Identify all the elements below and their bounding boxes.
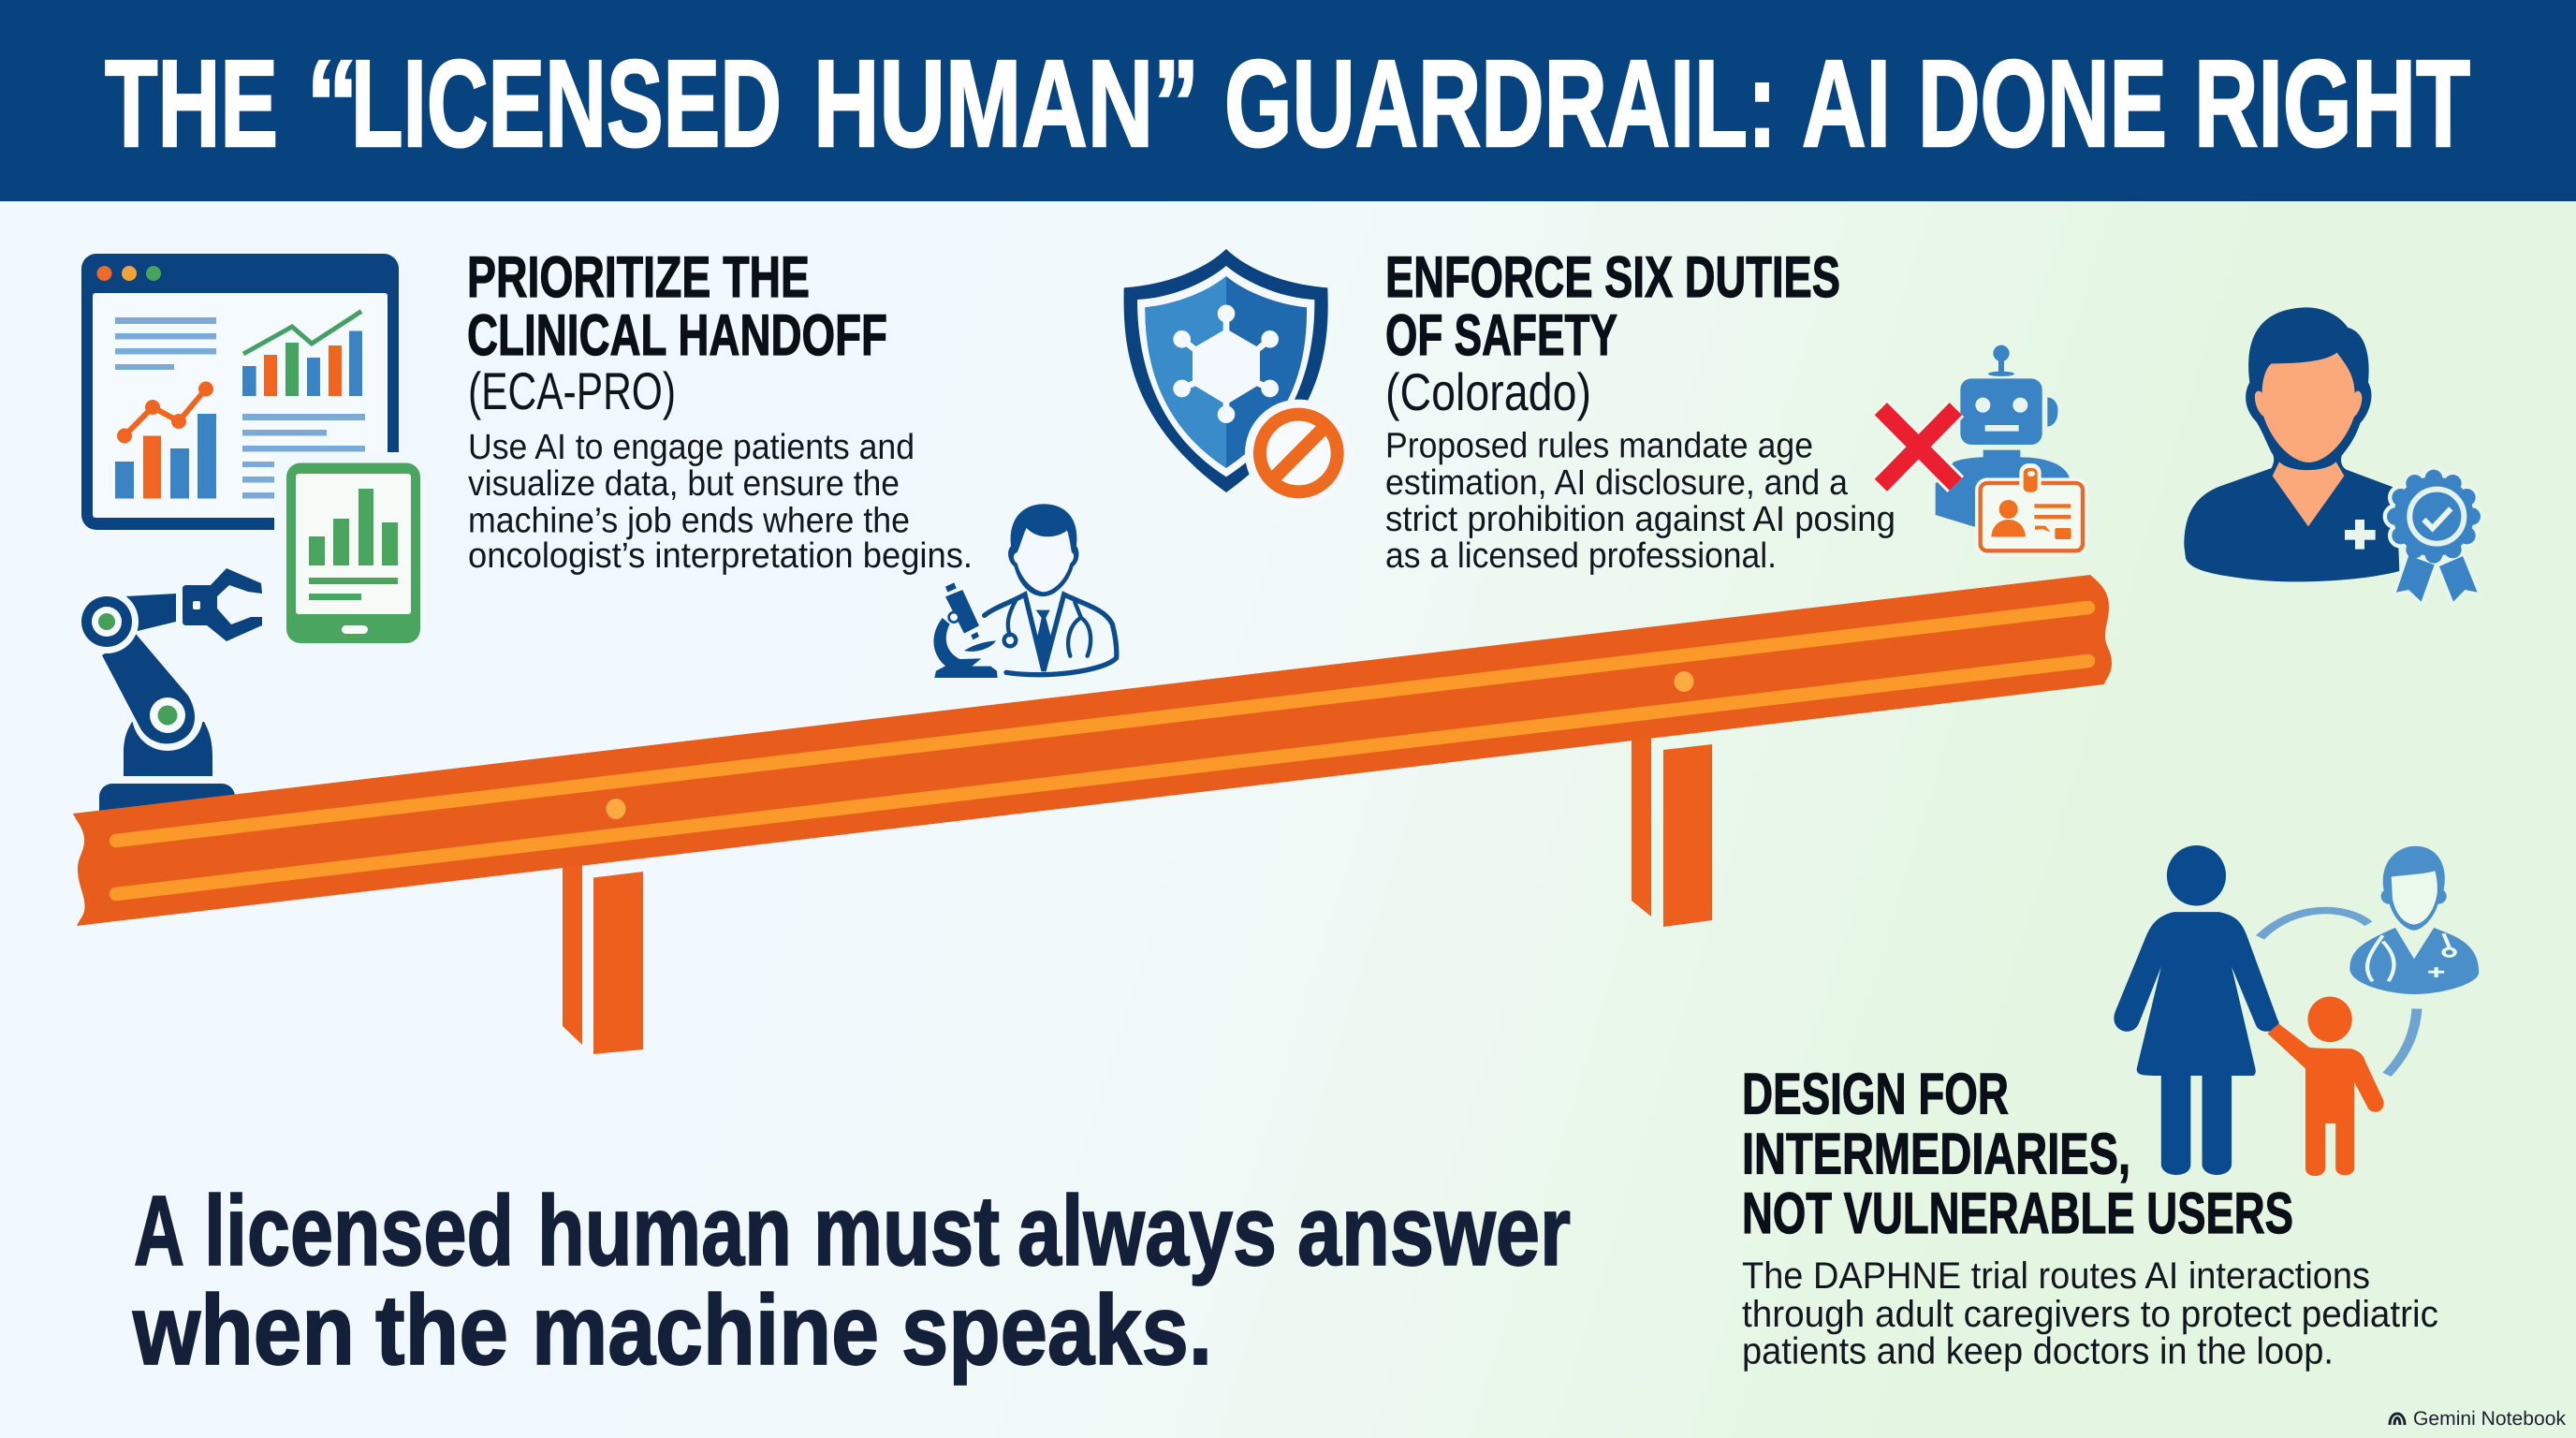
tagline: A [134,1176,184,1286]
rail highlights [116,608,2088,894]
body text: estimation, AI disclosure, and a [1385,463,1849,503]
icon: shield with prohibition sign [1124,249,1353,506]
panel: prioritize the clinical handoff [467,245,973,576]
tagline: when [132,1275,355,1386]
heading [1742,1062,2293,1246]
icon: caregiver, child and doctor [2114,845,2479,1176]
watermark: Gemini Notebook: Gemini Notebook [2413,1408,2566,1430]
body text: oncologist’s interpretation begins. [468,536,973,576]
tagline: must [813,1176,1000,1286]
ID badge [1981,463,2083,550]
heading: PRIORITIZE THE [467,245,810,310]
tagline: human [537,1176,792,1286]
icon: licensed professional with ribbon [2184,307,2481,602]
body text: as a licensed professional. [1385,536,1777,576]
title: GUARDRAIL: [1224,35,1777,172]
body text: Use AI to engage patients and [468,428,915,467]
red X [1881,409,1955,485]
title [105,35,2470,172]
caregiver [2114,845,2279,1175]
body text [1385,427,1895,576]
title: HUMAN” [813,35,1199,172]
icon: dashboard monitor with phone [81,254,433,658]
doctor [2349,846,2479,994]
body text: strict prohibition against AI posing [1385,500,1895,539]
panel: enforce six duties of safety [1385,245,1895,576]
rail beam [73,575,2112,926]
heading: NOT VULNERABLE USERS [1742,1181,2293,1246]
title: LICENSED [351,35,782,172]
tagline: speaks. [901,1275,1212,1386]
icon: robot arm [75,568,262,840]
guardrail [73,575,2112,1054]
title: RIGHT [2194,35,2470,172]
heading: CLINICAL HANDOFF [467,303,887,368]
tagline: answer [1297,1176,1571,1286]
heading [467,245,887,368]
body text: patients and keep doctors in the loop. [1742,1331,2334,1372]
body text: machine’s job ends where the [468,502,910,541]
heading: INTERMEDIARIES, [1742,1122,2130,1187]
heading: OF SAFETY [1385,303,1617,368]
rail bolts [607,671,1694,819]
panel: design for intermediaries [1742,1062,2438,1372]
body text: through adult caregivers to protect pediatric [1742,1294,2438,1335]
child [2267,997,2384,1176]
heading: ENFORCE SIX DUTIES [1385,245,1840,310]
body text [468,428,973,576]
body text: The DAPHNE trial routes AI interactions [1742,1255,2370,1297]
connecting arcs [2260,910,2417,1075]
tagline: licensed [204,1176,514,1286]
title: THE [105,35,278,172]
body text [1742,1255,2438,1372]
heading: DESIGN FOR [1742,1062,2009,1127]
title banner [0,0,2576,201]
left post [563,863,643,1054]
subheading: (Colorado) [1385,362,1591,421]
right post [1632,732,1712,927]
icon: robot with fake ID and red X [1881,345,2083,550]
tagline: always [1017,1176,1277,1286]
body text: Proposed rules mandate age [1385,427,1813,466]
title: AI [1802,35,1891,172]
heading [1385,245,1840,368]
title: “ [306,35,359,172]
subheading: (ECA-PRO) [468,361,676,420]
icon: doctor with microscope [933,504,1117,678]
tagline: the [375,1275,508,1386]
tagline: machine [532,1275,879,1386]
title: DONE [1918,35,2167,172]
tagline [132,1176,1571,1386]
body text: visualize data, but ensure the [468,464,900,504]
network node [1177,308,1276,420]
ribbon badge [2387,470,2481,602]
